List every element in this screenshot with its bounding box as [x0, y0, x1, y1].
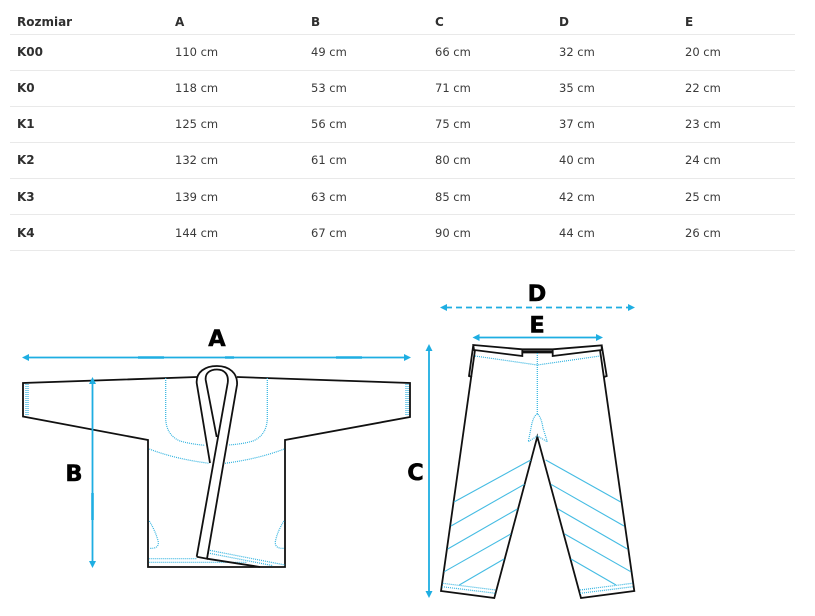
row K2: 24 cm [685, 153, 721, 167]
row K2: 40 cm [559, 153, 595, 167]
row K1: 23 cm [685, 117, 721, 131]
row K00: K00 [17, 45, 43, 59]
row K00: 110 cm [175, 45, 218, 59]
row K3: K3 [17, 190, 35, 204]
label D: D [528, 281, 546, 307]
table header row: Rozmiar [17, 15, 72, 29]
label E: E [529, 312, 545, 338]
arrow D dashed [440, 304, 635, 311]
row K1: 75 cm [435, 117, 471, 131]
table header row: B [311, 15, 320, 29]
row K4: 67 cm [311, 226, 347, 240]
table header row: C [435, 15, 444, 29]
row K3: 42 cm [559, 190, 595, 204]
row K0: 71 cm [435, 81, 471, 95]
row K0: 53 cm [311, 81, 347, 95]
label B: B [65, 461, 83, 487]
trousers diagram [441, 345, 634, 598]
trousers stitching [442, 353, 633, 593]
row K00: 66 cm [435, 45, 471, 59]
arrow B [89, 377, 96, 568]
row K0: K0 [17, 81, 35, 95]
row K00 [10, 35, 795, 71]
table header row [10, 0, 795, 35]
waistband centre piece [522, 350, 553, 353]
jacket body outline [23, 377, 410, 567]
row K3: 25 cm [685, 190, 721, 204]
arrow A [22, 354, 411, 361]
label C: C [407, 460, 424, 486]
trousers outline [441, 350, 634, 598]
row K1: K1 [17, 117, 35, 131]
row K0: 35 cm [559, 81, 595, 95]
row K2: 80 cm [435, 153, 471, 167]
row K4: 44 cm [559, 226, 595, 240]
arrow E [472, 334, 603, 341]
row K4: K4 [17, 226, 35, 240]
row K2 [10, 143, 795, 179]
row K1 [10, 107, 795, 143]
waistband [469, 345, 607, 377]
row K4: 26 cm [685, 226, 721, 240]
row K1: 56 cm [311, 117, 347, 131]
arrow C [426, 344, 432, 598]
row K1: 125 cm [175, 117, 218, 131]
row K3: 139 cm [175, 190, 218, 204]
jacket collar and lapel [197, 366, 260, 567]
label A: A [208, 326, 226, 352]
row K4: 144 cm [175, 226, 218, 240]
row K2: 132 cm [175, 153, 218, 167]
row K0 [10, 71, 795, 107]
table header row: E [685, 15, 693, 29]
jacket diagram [23, 366, 410, 567]
row K3: 85 cm [435, 190, 471, 204]
row K0: 118 cm [175, 81, 218, 95]
table header row: D [559, 15, 569, 29]
row K4: 90 cm [435, 226, 471, 240]
row K2: 61 cm [311, 153, 347, 167]
jacket stitching [26, 378, 408, 566]
size table [10, 15, 795, 251]
row K2: K2 [17, 153, 35, 167]
leg panel lines [444, 460, 631, 585]
row K0: 22 cm [685, 81, 721, 95]
row K1: 37 cm [559, 117, 595, 131]
row K00: 20 cm [685, 45, 721, 59]
row K00: 32 cm [559, 45, 595, 59]
row K3 [10, 179, 795, 215]
table header row: A [175, 15, 184, 29]
row K4 [10, 215, 795, 251]
row K00: 49 cm [311, 45, 347, 59]
row K3: 63 cm [311, 190, 347, 204]
